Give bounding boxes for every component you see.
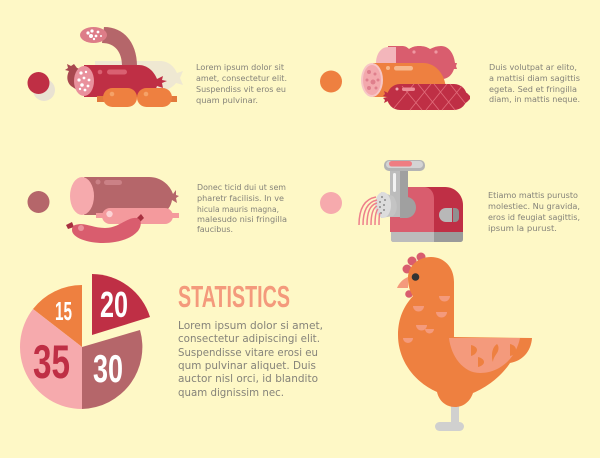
illustration: ham roll and sausages [66,177,179,243]
beak [397,277,408,288]
text: description three: faucibus. [197,224,233,234]
icon: dark red bullet [28,72,55,101]
heading: statistics: STATISTICS [178,279,290,314]
text: statistics body: quam dignissim nec. [178,386,284,399]
text: description three: pharetr facilisis. In ve [197,193,284,203]
text: description two [489,62,580,104]
text: description two: a mattisi diam sagittis [489,73,580,83]
icon: orange bullet [320,70,342,92]
text: statistics body: qum pulvinar aliquet. Duis [178,359,316,372]
panel: sausage group two [320,46,580,110]
illustration: bologna and checked sausage [361,46,470,110]
text: description three: Donec ticid dui ut sem [197,182,286,192]
text: description four: ipsum la purust. [488,223,557,233]
text: statistics body: Lorem ipsum dolor si amet, [178,319,323,332]
text: description one: amet, consectetur elit. [196,73,287,83]
text: description one: Suspendiss vit eros eu [196,84,286,94]
panel: sausage group three [28,177,287,243]
wing [449,338,520,373]
text: description four [488,190,580,233]
text: description two: diam, in mattis neque. [489,94,580,104]
red sausage [66,214,144,243]
icon: mauve bullet [28,191,50,213]
panel: sausage group one [28,27,287,107]
text: statistics body: auctor nisl orci, id blandito [178,372,318,385]
text: statistics body: Suspendisse vitare erosi eu [178,346,318,359]
feathers [403,296,450,343]
slice: 30: 30 [93,348,123,391]
leg and foot [435,405,464,431]
body [398,257,532,407]
illustration: meat grinder [359,160,463,242]
text: description one [196,62,287,105]
pie chart [20,274,150,409]
text: description three: malesudo nisi fringilla [197,214,287,224]
illustration: salami and sausages [65,27,183,107]
text: description two: egeta. Sed et fringilla [489,84,577,94]
text: statistics body [178,319,323,399]
illustration: hen [397,252,532,431]
slice: 15: 15 [55,296,72,326]
text: description three: hicula mauris magna, [197,204,279,214]
text: description three [197,182,287,234]
eye [412,273,419,281]
text: description four: Etiamo mattis purusto [488,190,578,200]
slice: 35: 35 [33,335,70,388]
text: description four: molestiec. Nu gravida, [488,201,580,211]
icon: pink bullet [320,192,342,214]
panel: meat grinder group [320,160,580,242]
text: statistics body: consectetur adipiscingi elit. [178,332,320,345]
text: description four: eros id feugiat sagittis, [488,212,580,222]
text: description two: Duis volutpat ar elito, [489,62,577,72]
comb [402,252,426,298]
text: description one: Lorem ipsum dolor sit [196,62,285,72]
slice: 20: 20 [100,284,128,325]
text: description one: quam pulvinar. [196,95,258,105]
